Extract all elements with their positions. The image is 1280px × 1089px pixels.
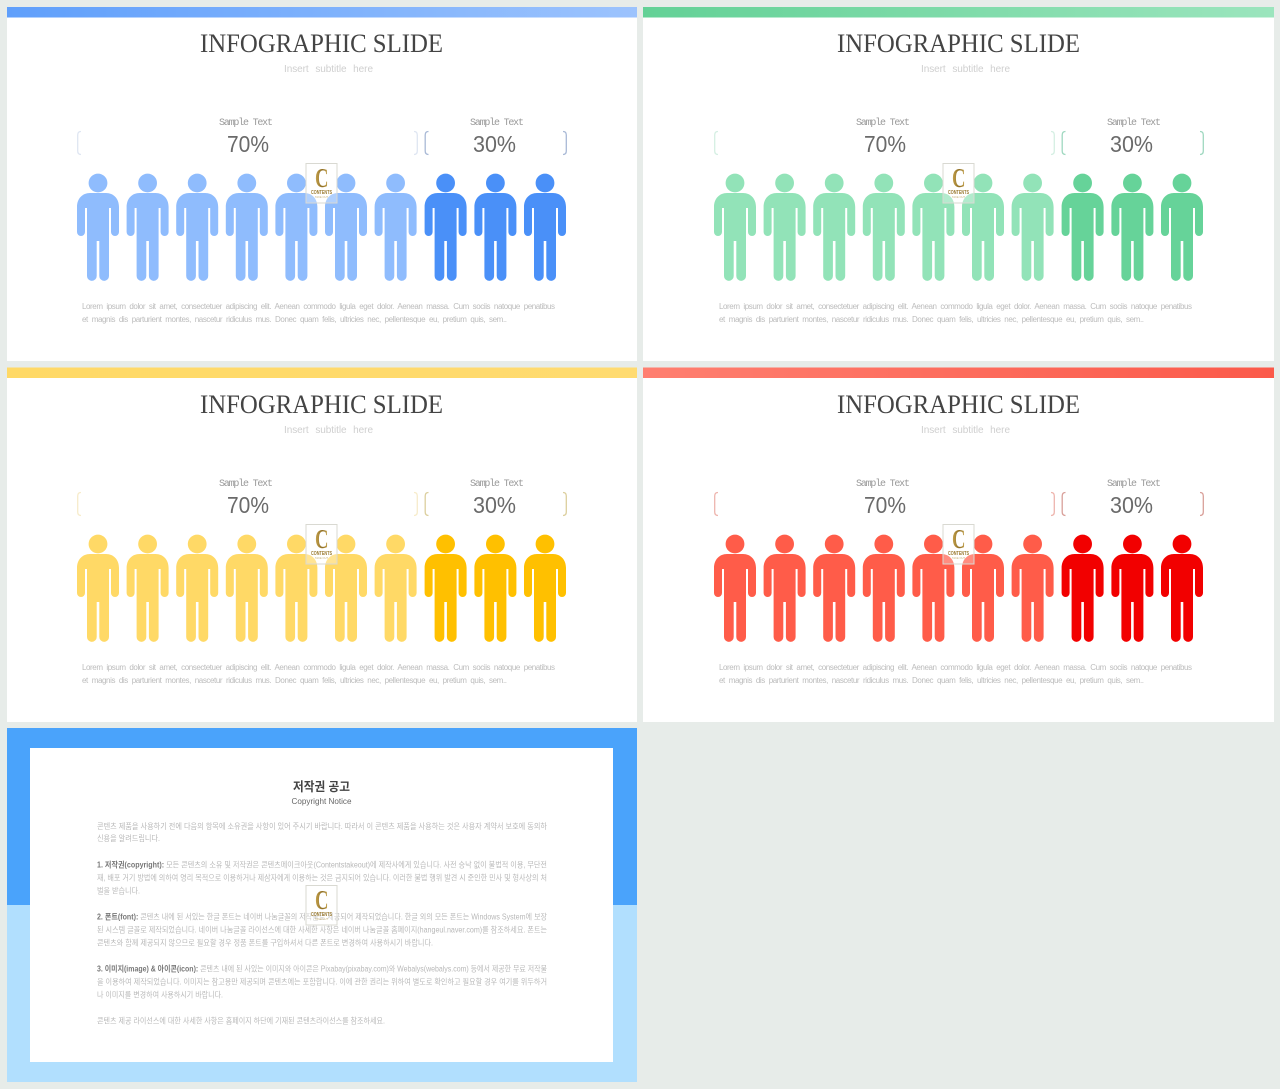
watermark badge: CONTENTS (948, 551, 970, 557)
watermark badge (306, 885, 337, 925)
body text: Lorem ipsum dolor sit amet, consectetuer adipiscing elit. Aenean commodo ligula eget dolor. Aenean massa. Cum sociis natoque penatibus (719, 663, 1192, 672)
title: INFOGRAPHIC SLIDE (837, 29, 1080, 58)
bracket: 70% group (715, 132, 1054, 154)
section 2: font: 2. 폰트(font): 콘텐츠 내에 된 서있는 한글 폰트는 네이버 나눔글꼴의 저작물로 제공되어 제작되었습니다. 한글 외의 모든 폰트는 Windows System에 보장 (97, 912, 548, 922)
watermark badge: CONTENTS (948, 190, 970, 196)
label: 30 percent group: Sample Text (470, 117, 524, 129)
panel: yellow slide (7, 368, 637, 722)
watermark badge: TAKE OUT (952, 196, 965, 199)
title: INFOGRAPHIC SLIDE (200, 29, 443, 58)
panel: copyright notice (7, 728, 637, 1082)
value: 30%: 30% (1110, 131, 1153, 157)
closing line: 콘텐츠 제공 라이선스에 대한 사세한 사항은 홈페이지 하단에 기재된 콘텐츠라이선스를 참조하세요. (97, 1016, 385, 1026)
watermark badge (306, 524, 337, 564)
value: 30%: 30% (473, 492, 516, 518)
body text: Lorem ipsum dolor sit amet, consectetuer adipiscing elit. Aenean commodo ligula eget dolor. Aenean massa. Cum sociis natoque penatibus (82, 302, 555, 311)
blue top bar (7, 7, 637, 18)
title: INFOGRAPHIC SLIDE (200, 390, 443, 419)
value: 70%: 70% (864, 492, 906, 518)
body text: et magnis dis parturient montes, nascetur ridiculus mus. Donec quam felis, ultricies nec, pellentesque eu, pretium quis, sem.. (82, 315, 507, 324)
watermark badge: TAKE OUT (952, 557, 965, 560)
body text: Lorem ipsum dolor sit amet, consectetuer adipiscing elit. Aenean commodo ligula eget dolor. Aenean massa. Cum sociis natoque penatibus (719, 302, 1192, 311)
value: 70%: 70% (864, 131, 906, 157)
subtitle: Insert subtitle here (921, 64, 1010, 75)
label: 70 percent group: Sample Text (219, 117, 273, 129)
watermark badge (943, 163, 974, 203)
pictogram: ten people, seven light and three dark (77, 535, 566, 642)
subtitle: Insert subtitle here (284, 425, 373, 436)
body text: et magnis dis parturient montes, nascetur ridiculus mus. Donec quam felis, ultricies nec, pellentesque eu, pretium quis, sem.. (82, 676, 507, 685)
green top bar (643, 7, 1274, 18)
section 3: image and icon: 나 이미지를 변경하여 사용하시기 바랍니다. (97, 990, 223, 1000)
body text: et magnis dis parturient montes, nascetur ridiculus mus. Donec quam felis, ultricies nec, pellentesque eu, pretium quis, sem.. (719, 315, 1144, 324)
watermark badge (943, 524, 974, 564)
watermark badge: C (315, 885, 328, 915)
bracket: 70% group (78, 492, 417, 516)
value: 30%: 30% (473, 131, 516, 157)
watermark badge: C (952, 524, 966, 554)
watermark badge: TAKE OUT (315, 557, 328, 560)
slide content (714, 29, 1203, 324)
panel: green slide (643, 7, 1274, 361)
body text (719, 663, 1192, 685)
bracket: 70% group (78, 132, 417, 154)
red top bar (643, 368, 1274, 378)
pictogram: ten people, seven light and three dark (77, 174, 566, 281)
watermark badge: C (952, 163, 966, 193)
body text: Lorem ipsum dolor sit amet, consectetuer adipiscing elit. Aenean commodo ligula eget dolor. Aenean massa. Cum sociis natoque penatibus (82, 663, 555, 672)
watermark badge (306, 163, 337, 203)
bracket: 30% group (1062, 492, 1203, 516)
section 3: image and icon: 3. 이미지(image) & 아이콘(icon): 콘텐츠 내에 된 사있는 이미지와 아이콘은 Pixabay(pixabay.com)와 Webalys(webalys.com) 등에서 제공한 무료 저작물 (97, 964, 547, 974)
section 2: font: 된 시스템 글꼴로 제작되었습니다. 네이버 나눔글꼴 라이선스에 대한 사세한 사항은 네이버 나눔글꼴 홈페이지(hangeul.naver.com)를 참조하세요. 폰트는 (97, 924, 547, 934)
bracket: 70% group (715, 492, 1054, 516)
panel: red slide (643, 368, 1274, 722)
section 2: font: 콘텐츠와 함께 제공되지 않으므로 필요할 경우 정품 폰트를 구입하셔서 다른 폰트로 변경하여 사용하시기 바랍니다. (97, 938, 433, 948)
label: 30 percent group: Sample Text (1107, 478, 1161, 490)
title: INFOGRAPHIC SLIDE (837, 390, 1080, 419)
watermark badge: C (315, 524, 328, 554)
label: 70 percent group: Sample Text (856, 478, 910, 490)
watermark badge: TAKE OUT (315, 196, 328, 199)
body text (82, 663, 555, 685)
bracket: 30% group (1062, 132, 1203, 154)
bracket: 30% group (425, 492, 566, 516)
intro paragraph: 콘텐츠 제품을 사용하기 전에 다음의 항목에 소유권을 사항이 있어 주시기 바랍니다. 따라서 이 콘텐츠 제품을 사용하는 것은 사용자 계약서 보호에 동의하 (97, 821, 548, 831)
watermark badge: TAKE OUT (315, 918, 328, 921)
pictogram: ten people, seven light and three dark (714, 174, 1203, 281)
label: 70 percent group: Sample Text (856, 117, 910, 129)
copyright heading: 저작권 공고 (293, 779, 350, 794)
section 1: copyright: 1. 저작권(copyright): 모든 콘텐츠의 소유 및 저작권은 콘텐츠메이크아웃(Contentstakeout)에 제작사에게 있습니다. 사전 승낙 없이 불법적 이용, 무단전 (97, 860, 547, 870)
label: 30 percent group: Sample Text (470, 478, 524, 490)
value: 70%: 70% (227, 131, 269, 157)
panel: blue slide (7, 7, 637, 361)
section 1: copyright (97, 860, 547, 896)
value: 30%: 30% (1110, 492, 1153, 518)
subtitle: Insert subtitle here (921, 425, 1010, 436)
copyright subheading: Copyright Notice (292, 796, 352, 806)
slide content (714, 390, 1203, 685)
bracket: 30% group (425, 132, 566, 154)
pictogram: ten people, seven light and three dark (714, 535, 1203, 642)
watermark badge: CONTENTS (311, 912, 333, 918)
value: 70%: 70% (227, 492, 269, 518)
label: 70 percent group: Sample Text (219, 478, 273, 490)
watermark badge: CONTENTS (311, 190, 333, 196)
section 2: font (97, 912, 548, 948)
section 3: image and icon: 을 이용하여 제작되었습니다. 이미지는 참고용만 제공되며 콘텐츠에는 포함합니다. 이에 관한 권리는 위하여 별도로 확인하고 필요할 경우 여기를 위두하거 (97, 976, 547, 986)
body text: et magnis dis parturient montes, nascetur ridiculus mus. Donec quam felis, ultricies nec, pellentesque eu, pretium quis, sem.. (719, 676, 1144, 685)
label: 30 percent group: Sample Text (1107, 117, 1161, 129)
body text (82, 302, 555, 324)
body text (719, 302, 1192, 324)
section 1: copyright: 재, 배포 거기 방법에 의하여 영리 목적으로 이용하거나 제삼자에게 이용하는 것은 금지되어 있습니다. 이러한 불법 행위 발견 시 준인한 민사 및 형사상의 처 (97, 872, 547, 882)
intro paragraph: 신용을 알려드립니다. (97, 833, 160, 843)
watermark badge: CONTENTS (311, 551, 333, 557)
intro paragraph (97, 821, 548, 843)
watermark badge: C (315, 163, 328, 193)
section 3: image and icon (97, 964, 547, 1000)
section 1: copyright: 벌을 받습니다. (97, 886, 140, 896)
yellow top bar (7, 368, 637, 378)
subtitle: Insert subtitle here (284, 64, 373, 75)
